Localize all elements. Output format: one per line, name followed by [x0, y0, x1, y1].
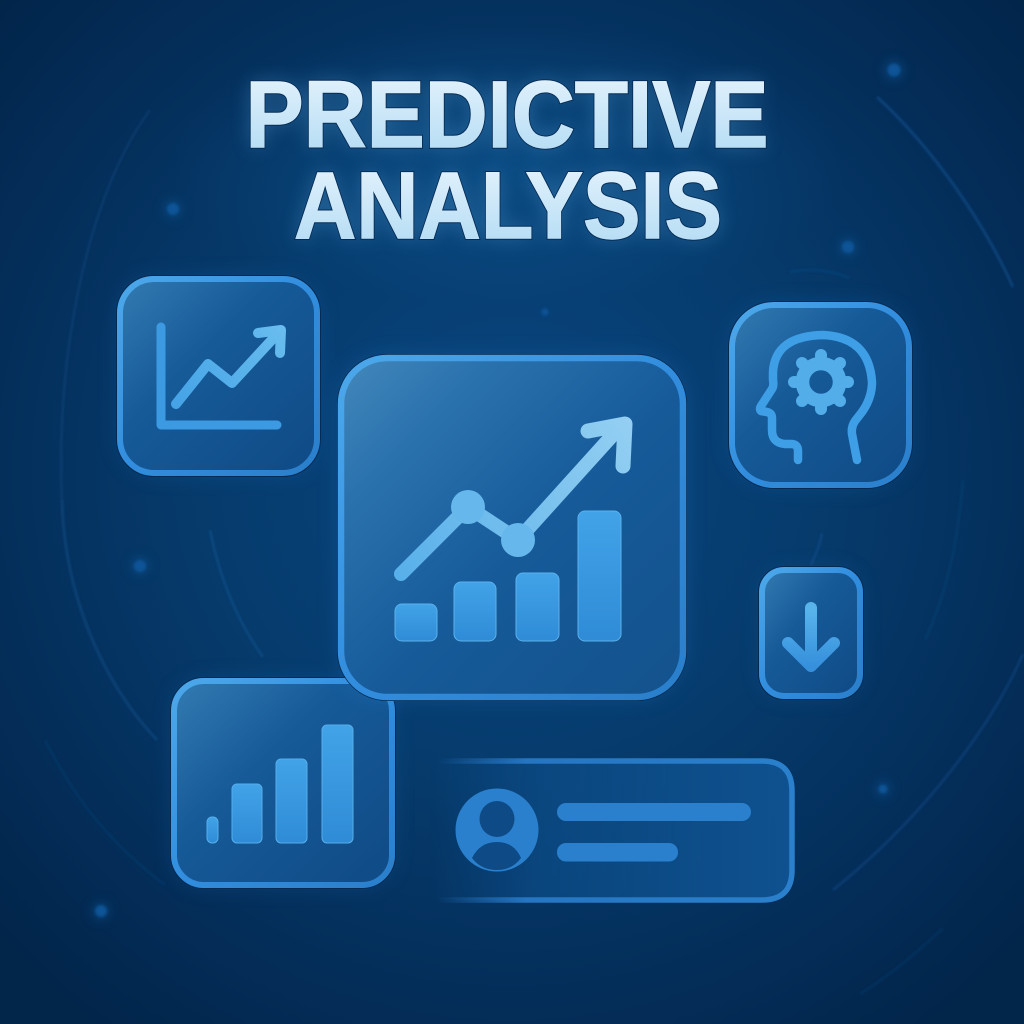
title: PREDICTIVE: [246, 62, 768, 168]
title: ANALYSIS: [294, 153, 722, 259]
trend nodes: [451, 490, 485, 524]
icon: gear: [794, 355, 848, 409]
icon: head outline: [760, 335, 872, 460]
panel: bar chart card: [174, 681, 392, 885]
panel: line chart card: [120, 279, 317, 473]
panel: main chart card: [341, 358, 683, 697]
main bars: [395, 511, 621, 641]
title: ANALYSIS: [294, 153, 722, 259]
main trend arrow: [401, 424, 625, 574]
title: PREDICTIVE: [246, 62, 768, 168]
icon: avatar: [456, 788, 538, 872]
bars: [207, 725, 353, 843]
icon: down arrow: [788, 608, 834, 666]
icon: axes: [161, 327, 277, 425]
panel: head with gear card: [732, 305, 909, 485]
text lines: [557, 803, 751, 821]
title: PREDICTIVE: [246, 62, 768, 168]
title glow backdrop: [167, 25, 847, 305]
panel: profile card: [430, 761, 792, 900]
title: [246, 62, 768, 259]
panel: down arrow card: [762, 570, 860, 696]
title: ANALYSIS: [294, 153, 722, 259]
icon: rising arrow: [176, 330, 281, 404]
